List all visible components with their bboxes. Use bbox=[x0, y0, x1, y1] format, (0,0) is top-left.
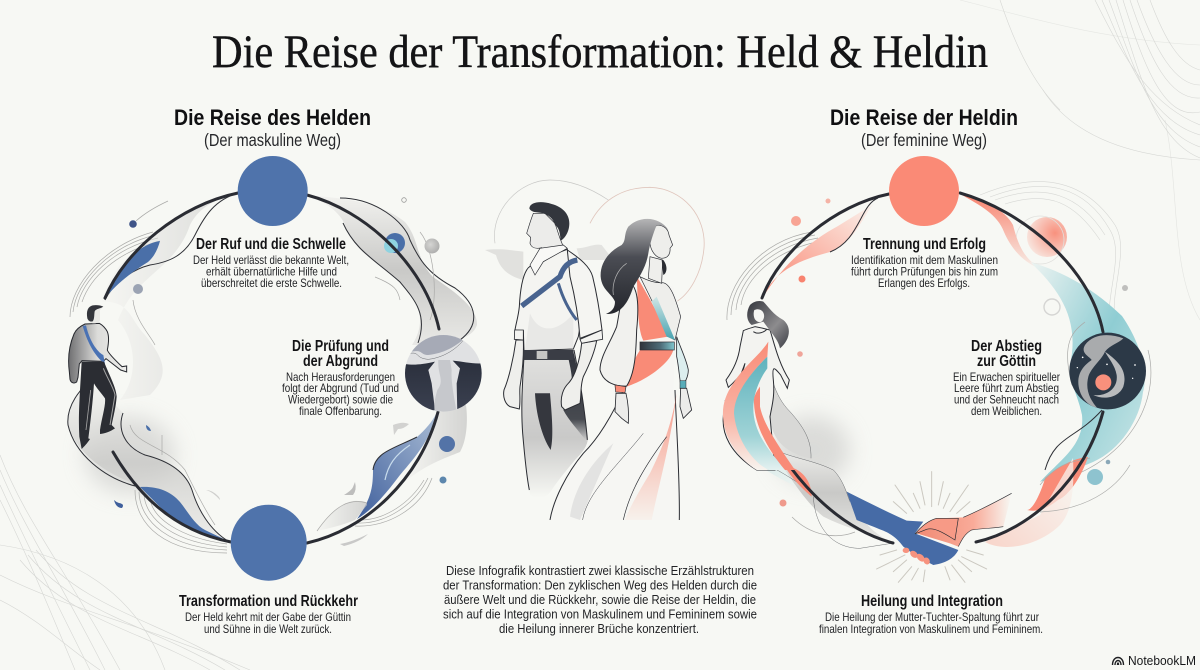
step: Der Abstieg zur Göttin bbox=[953, 338, 1060, 418]
blue arm bbox=[847, 492, 958, 565]
intro paragraph: der Transformation: Den zyklischen Weg des Helden durch die bbox=[443, 578, 757, 592]
step: Der Abstieg zur Göttin: Der Abstieg bbox=[971, 338, 1042, 355]
heading: heroine journey bbox=[830, 105, 1018, 150]
step: Der Ruf und die Schwelle: Der Ruf und die Schwelle bbox=[196, 236, 346, 253]
heading: hero journey: Die Reise des Helden bbox=[174, 105, 371, 130]
intro paragraph bbox=[443, 563, 757, 636]
step: Transformation und Rückkehr: Transformation und Rückkehr bbox=[179, 593, 358, 610]
heroine lower ribbons bbox=[725, 383, 893, 548]
step: Der Abstieg zur Göttin: dem Weiblichen. bbox=[971, 404, 1042, 418]
coral thumb bbox=[915, 518, 958, 540]
icon: chasm sphere bbox=[405, 335, 482, 412]
hero cycle ribbons bbox=[67, 193, 477, 553]
heading: hero journey: (Der maskuline Weg) bbox=[204, 130, 341, 150]
heroine cycle ribbons bbox=[727, 182, 1151, 547]
step: Trennung und Erfolg: Erlangen des Erfolgs. bbox=[878, 276, 970, 290]
step: Die Prüfung und der Abgrund: Wiedergebort) sowie die bbox=[288, 392, 393, 406]
node: top coral circle bbox=[889, 156, 959, 226]
step: Heilung und Integration bbox=[819, 593, 1043, 636]
step: Trennung und Erfolg: Identifikation mit dem Maskulinen bbox=[851, 253, 998, 267]
woman bbox=[550, 219, 692, 520]
intro paragraph: Diese Infografik kontrastiert zwei klassische Erzählstrukturen bbox=[446, 563, 754, 578]
step: Der Ruf und die Schwelle: Der Held verlässt die bekannte Welt, bbox=[193, 253, 349, 267]
step: Die Prüfung und der Abgrund: folgt der Abgrund (Tud und bbox=[282, 381, 399, 395]
step: Heilung und Integration: finalen Integration von Maskulinem und Femininem. bbox=[819, 622, 1043, 636]
step: Transformation und Rückkehr: und Sühne in die Welt zurück. bbox=[204, 622, 332, 636]
hero cycle arc segments bbox=[105, 193, 439, 543]
intro paragraph: äußere Welt und die Rückkehr, sowie die Reise der Heldin, die bbox=[444, 592, 756, 607]
heading: heroine journey: Die Reise der Heldin bbox=[830, 105, 1018, 130]
step: Der Ruf und die Schwelle: erhält übernatürliche Hilfe und bbox=[206, 264, 337, 278]
coral arm bbox=[917, 493, 1012, 547]
figure: hero walking bbox=[69, 305, 127, 449]
panel: hero journey bbox=[67, 105, 487, 636]
step: Heilung und Integration: Die Heilung der Mutter-Tuchter-Spaltung führt zur bbox=[825, 610, 1039, 624]
decorative line fans: bottom left bbox=[0, 455, 250, 670]
step: Der Ruf und die Schwelle bbox=[193, 236, 349, 290]
handshake bbox=[847, 472, 1012, 582]
title: Die Reise der Transformation: Held & Heldin bbox=[212, 26, 988, 78]
heroine cycle arc segments bbox=[757, 193, 1103, 543]
step: Der Abstieg zur Göttin: Ein Erwachen spiritueller bbox=[953, 370, 1060, 384]
step: Trennung und Erfolg: führt durch Prüfungen bis hin zum bbox=[851, 264, 998, 278]
step: Der Ruf und die Schwelle: überschreitet die erste Schwelle. bbox=[201, 276, 342, 290]
node: top blue circle bbox=[238, 156, 308, 226]
heading: heroine journey: (Der feminine Weg) bbox=[861, 130, 987, 150]
step: Die Prüfung und der Abgrund: der Abgrund bbox=[303, 353, 378, 370]
panel: heroine journey bbox=[723, 105, 1151, 636]
intro paragraph: sich auf die Integration von Maskulinem und Femininem sowie bbox=[443, 607, 757, 622]
node: bottom blue circle bbox=[231, 505, 307, 581]
step: Transformation und Rückkehr: Der Held kehrt mit der Gabe der Güttin bbox=[185, 610, 351, 624]
step: Transformation und Rückkehr bbox=[179, 593, 358, 636]
man bbox=[504, 202, 603, 498]
step: Heilung und Integration: Heilung und Integration bbox=[861, 593, 1003, 610]
step: Die Prüfung und der Abgrund: Nach Herausforderungen bbox=[286, 370, 395, 384]
figure: heroine small bbox=[723, 301, 795, 470]
logo: NotebookLM: NotebookLM bbox=[1128, 653, 1196, 668]
step: Die Prüfung und der Abgrund: finale Offenbarung. bbox=[299, 404, 382, 418]
hand contour lines bbox=[958, 493, 1012, 547]
step: Der Abstieg zur Göttin: und der Sehneucht nach bbox=[954, 392, 1059, 406]
step: Die Prüfung und der Abgrund bbox=[282, 338, 399, 418]
rays bbox=[877, 472, 987, 582]
coral fingers bbox=[903, 548, 931, 566]
step: Der Abstieg zur Göttin: zur Göttin bbox=[977, 353, 1036, 370]
decorative line fans: top right bbox=[960, 0, 1200, 320]
step: Trennung und Erfolg: Trennung und Erfolg bbox=[863, 236, 986, 253]
step: Die Prüfung und der Abgrund: Die Prüfung und bbox=[292, 338, 389, 355]
halos and landscape bbox=[485, 180, 704, 302]
icon: goddess sphere bbox=[1069, 332, 1146, 410]
intro paragraph: die Heilung innerer Brüche konzentriert. bbox=[499, 621, 699, 636]
illustration: hero and heroine bbox=[485, 180, 704, 520]
step: Der Abstieg zur Göttin: Leere führt zum Abstieg bbox=[954, 381, 1059, 395]
heading: hero journey bbox=[174, 105, 371, 150]
step: Trennung und Erfolg bbox=[851, 236, 998, 290]
